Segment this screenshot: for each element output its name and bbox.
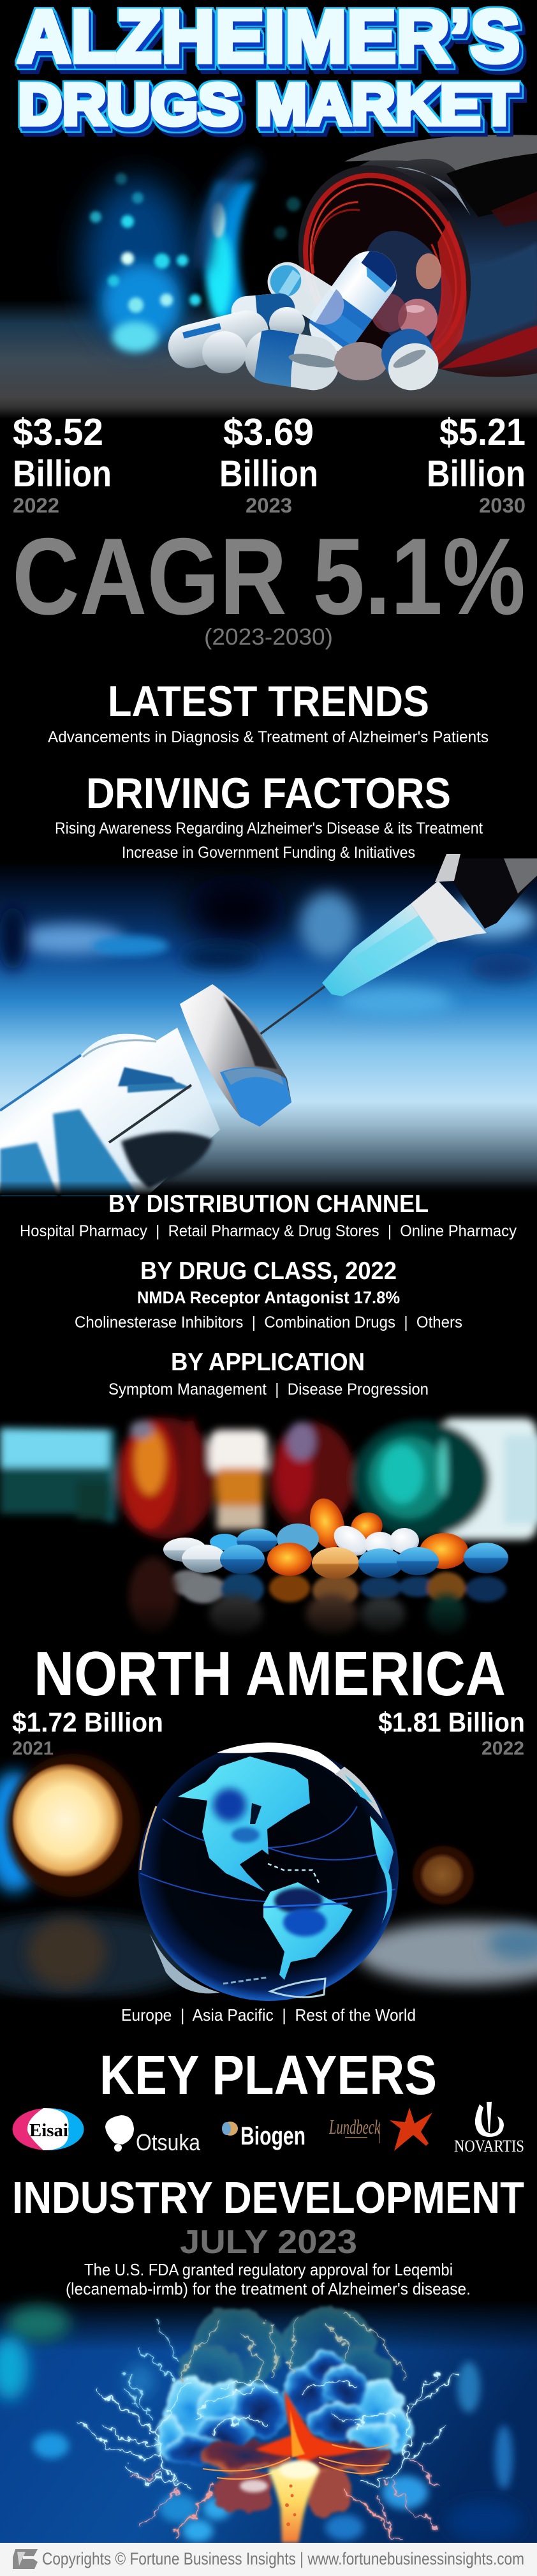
globe sphere — [138, 1743, 399, 2001]
footer bar — [0, 2543, 537, 2576]
other regions: Europe | Asia Pacific | Rest of the World — [121, 2005, 416, 2025]
logo: Otsuka: Otsuka — [136, 2129, 201, 2155]
logo: Lundbeck: Lundbeck — [328, 2115, 381, 2138]
logo: Biogen: Biogen — [240, 2122, 305, 2150]
vial cap — [180, 984, 291, 1127]
north america 2021 value — [12, 1707, 163, 1759]
hero image: spilled capsules and red bottle — [0, 135, 537, 419]
driving factors text — [55, 820, 483, 862]
market size 2023: 2023 — [246, 494, 292, 517]
north america 2022 value: 2022 — [482, 1738, 524, 1759]
driving factors text: Rising Awareness Regarding Alzheimer's Disease & its Treatment — [55, 820, 483, 837]
background bokeh — [0, 2305, 523, 2542]
heading: by distribution channel: BY DISTRIBUTION CHANNEL — [108, 1190, 429, 1218]
development date: JULY 2023 — [180, 2224, 357, 2261]
capsule: pink tinted — [334, 342, 388, 380]
driving factors text: Increase in Government Funding & Initiatives — [122, 844, 415, 862]
market size 2030: Billion — [427, 453, 526, 495]
market size 2030 — [427, 411, 526, 517]
south america — [263, 1882, 353, 1980]
market size 2030: $5.21 — [439, 411, 526, 453]
pills and bottles image — [0, 1417, 537, 1644]
logo: Biogen — [222, 2122, 305, 2150]
market size 2022: Billion — [13, 453, 112, 495]
market size 2022: $3.52 — [13, 411, 103, 453]
logo: Otsuka — [105, 2115, 201, 2155]
logo: Eisai — [13, 2108, 84, 2150]
capsule: rear left blue band — [231, 294, 295, 326]
bottle mouth ring — [273, 144, 496, 389]
heading: latest trends: LATEST TRENDS — [108, 677, 429, 726]
heading: by application: BY APPLICATION — [171, 1349, 365, 1376]
brain lobes — [157, 2350, 411, 2465]
europe and africa edge — [370, 1816, 394, 1878]
development description: (lecanemab-irmb) for the treatment of Alzheimer's disease. — [66, 2279, 471, 2298]
capsule: left white — [164, 306, 273, 373]
logo: Lundbeck — [328, 2108, 432, 2151]
background lights — [0, 1754, 474, 1905]
heading: by drug class: BY DRUG CLASS, 2022 — [140, 1257, 397, 1285]
vial — [0, 984, 537, 1195]
drug class segments: Cholinesterase Inhibitors | Combination Drugs | Others — [75, 1314, 462, 1331]
globe image — [0, 1742, 537, 2015]
north america — [178, 1756, 310, 1892]
market size 2030: 2030 — [479, 494, 526, 517]
north america 2021 value: $1.72 Billion — [12, 1707, 163, 1738]
north america 2022 value: $1.81 Billion — [378, 1707, 525, 1738]
market size 2023: $3.69 — [223, 411, 314, 453]
pink pills inside bottle — [398, 299, 438, 338]
capsule: diagonal blue and white — [309, 251, 397, 352]
bottle body — [357, 139, 537, 377]
market size 2022: 2022 — [13, 494, 59, 517]
market size 2023: Billion — [219, 453, 318, 495]
development description: The U.S. FDA granted regulatory approval for Leqembi — [84, 2260, 453, 2279]
antarctica — [270, 1979, 325, 1997]
upper lobes — [180, 2305, 394, 2397]
title: DRUGS MARKET — [18, 72, 518, 137]
capsule: front large — [245, 329, 338, 391]
syringe and vial image — [0, 854, 537, 1195]
development description — [66, 2260, 471, 2298]
logo: Novartis — [454, 2102, 524, 2155]
heading: key players: KEY PLAYERS — [99, 2044, 437, 2106]
logo: Eisai: Eisai — [29, 2120, 68, 2141]
lower folds — [201, 2441, 390, 2517]
capsule: tilted light-blue end — [268, 262, 344, 325]
glowing veins — [77, 2314, 459, 2540]
reflections — [129, 1557, 506, 1635]
latest trends text: Advancements in Diagnosis & Treatment of Alzheimer's Patients — [48, 728, 489, 746]
application segments: Symptom Management | Disease Progression — [108, 1381, 429, 1398]
distribution channel segments: Hospital Pharmacy | Retail Pharmacy & Drug Stores | Online Pharmacy — [20, 1222, 517, 1240]
market size 2023 — [219, 411, 318, 517]
logo: Novartis: NOVARTIS — [454, 2137, 524, 2155]
orange core — [203, 2390, 389, 2543]
table surface — [0, 1915, 537, 2015]
north america 2021 value: 2021 — [12, 1738, 54, 1759]
capsule: front right — [374, 321, 446, 398]
market size 2022 — [13, 411, 112, 517]
brain image — [0, 2300, 537, 2543]
leading drug class: NMDA Receptor Antagonist 17.8% — [137, 1288, 400, 1307]
capsule: round white end — [202, 331, 247, 373]
heading: driving factors: DRIVING FACTORS — [86, 769, 451, 818]
tablets cluster — [163, 1495, 508, 1579]
title — [17, 0, 520, 137]
footer logo — [13, 2549, 38, 2569]
north america 2022 value — [378, 1707, 525, 1759]
syringe — [250, 854, 537, 1042]
CAGR period: (2023-2030) — [204, 624, 333, 650]
